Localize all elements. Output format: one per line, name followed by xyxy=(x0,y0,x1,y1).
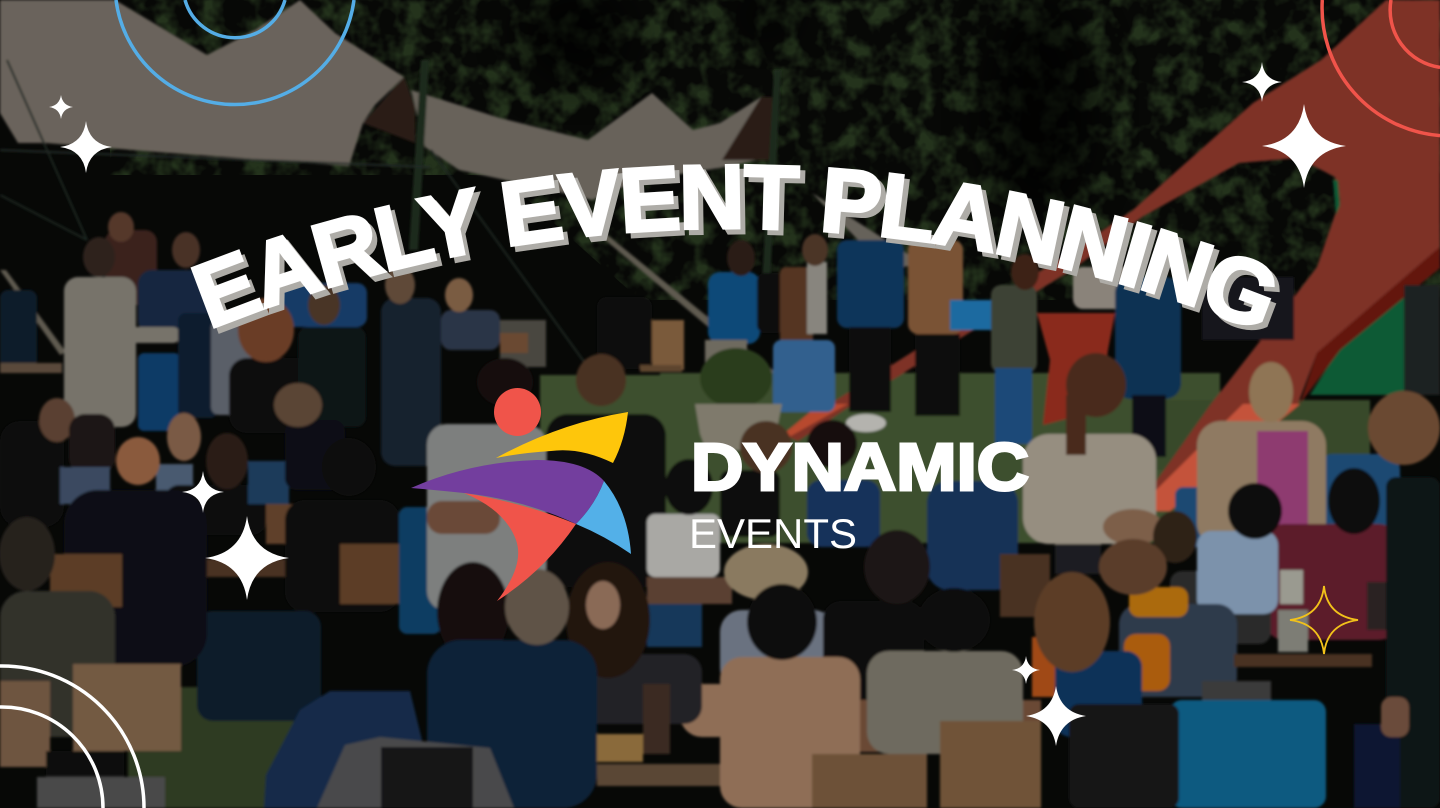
logo wordmark: EVENTS: EVENTS xyxy=(689,510,857,557)
title: curved heading: EARLY EVENT PLANNING xyxy=(190,164,1280,334)
logo icon: purple wing xyxy=(411,460,604,524)
decorative circles: blue top left xyxy=(116,0,354,105)
seated crowd left xyxy=(0,421,64,527)
mid ground walkers xyxy=(708,272,760,344)
decorative circles: white bottom left xyxy=(0,666,144,808)
back row standing people xyxy=(0,290,37,368)
bottom left chairs and coats xyxy=(0,681,50,767)
logo icon: yellow wing xyxy=(496,412,628,463)
decorative circles: coral top right xyxy=(1322,0,1440,136)
sparkle stars xyxy=(49,62,1346,746)
standing women right xyxy=(1023,434,1156,544)
logo: Dynamic Events xyxy=(411,388,1029,601)
logo icon: coral circle xyxy=(494,388,541,436)
bottom centre people xyxy=(720,610,835,690)
logo icon: red wing xyxy=(464,493,576,601)
red sail tensile structure xyxy=(789,0,1440,511)
logo icon: blue wing xyxy=(576,481,631,554)
seated crowd centre xyxy=(546,414,666,587)
background photo: trees foliage xyxy=(110,0,1440,300)
grass areas xyxy=(540,375,1220,443)
right foreground people xyxy=(1266,524,1397,640)
green inflatable xyxy=(1310,297,1404,395)
logo wordmark: DYNAMIC: DYNAMIC xyxy=(691,430,1029,505)
sparkle outline: gold xyxy=(1290,586,1358,654)
